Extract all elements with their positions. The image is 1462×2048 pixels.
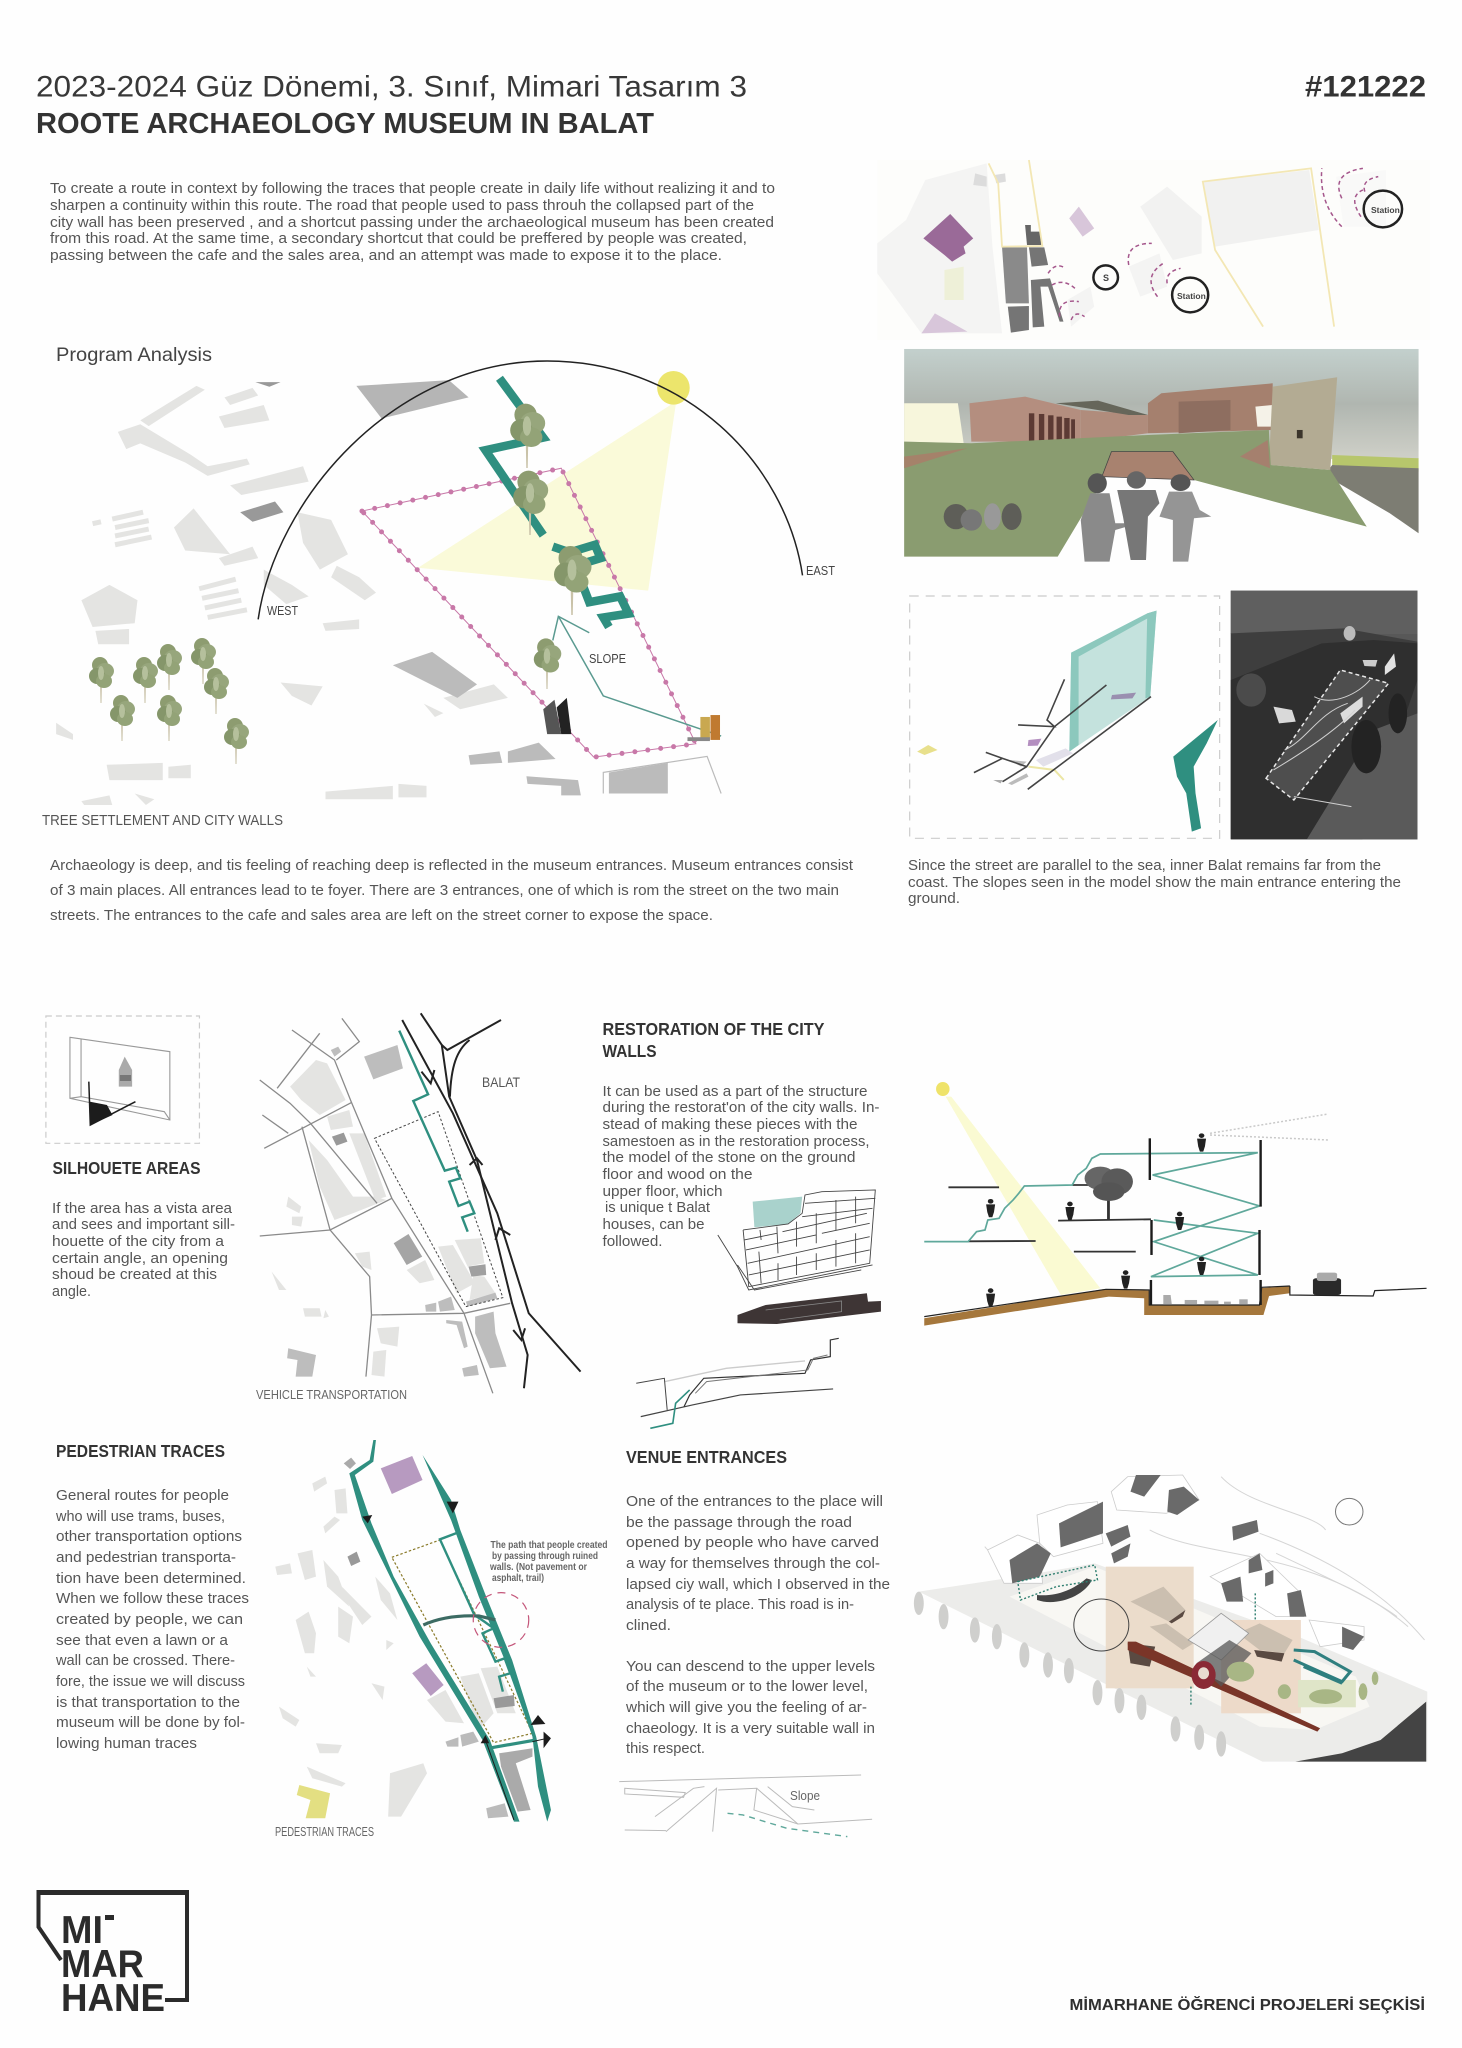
heading: restoration (602, 1019, 825, 1061)
floors (948, 1185, 1151, 1252)
callout: path annotation (489, 1539, 608, 1584)
pedestrian text: lowing human traces (56, 1736, 197, 1752)
entrances text block: of 3 main places. All entrances lead to te foyer. There are 3 entrances, one of which is rom the street on the two main (50, 883, 839, 899)
pedestrian text: see that even a lawn or a (56, 1633, 229, 1649)
model caption text (908, 858, 1401, 907)
context buildings (56, 386, 508, 805)
dashed view line (1254, 1593, 1256, 1620)
panel: axonometric site view (914, 1475, 1427, 1762)
label pedestrian traces: PEDESTRIAN TRACES (275, 1824, 374, 1839)
pedestrian text: fore, the issue we will discuss (56, 1674, 245, 1690)
teal route (399, 1031, 474, 1232)
people at east entrance (687, 715, 720, 741)
garden (1227, 1662, 1378, 1704)
contour lines (985, 1477, 1425, 1640)
pedestrian text (55, 1488, 249, 1752)
restoration text: houses, can be (602, 1217, 704, 1233)
label vehicle transportation: VEHICLE TRANSPORTATION (256, 1387, 407, 1402)
intro text block: from this road. At the same time, a secondary shortcut that could be preffered by people was created, (50, 231, 747, 247)
teal pedestrian routes (349, 1440, 551, 1822)
panel: vehicle transportation map (260, 1013, 581, 1393)
logo: Mimarhane: MAR (61, 1943, 144, 1986)
purple and yellow landmarks (297, 1456, 444, 1818)
icon: S stop (1093, 265, 1118, 289)
restoration text: stead of making these pieces with the (602, 1117, 858, 1133)
map label station east: Station (1371, 205, 1400, 215)
label east: EAST (806, 564, 835, 578)
map label S: S (1103, 273, 1109, 283)
pedestrian text: General routes for people (56, 1488, 229, 1504)
sun path arc (258, 361, 803, 619)
callout circles (1074, 1599, 1129, 1651)
restoration text: samestoen as in the restoration process, (602, 1134, 870, 1150)
callout: path annotation: asphalt, trail) (492, 1572, 544, 1584)
panel: stone wall sketch (718, 1190, 881, 1324)
restoration text: upper floor, which (602, 1184, 722, 1200)
model caption text: ground. (908, 891, 960, 907)
logo: Mimarhane: HANE (61, 1977, 165, 2020)
people sitting (944, 503, 1022, 531)
pedestrian text: who will use trams, buses, (55, 1509, 225, 1525)
panel: silhouette sketch (46, 1016, 199, 1143)
people walking (1081, 471, 1211, 562)
pedestrian text: and pedestrian transporta- (56, 1550, 236, 1566)
label tree settlement: TREE SETTLEMENT AND CITY WALLS (42, 812, 283, 829)
label balat: BALAT (482, 1075, 520, 1090)
venue text: which will give you the feeling of ar- (625, 1700, 867, 1716)
heading: restoration: WALLS (602, 1041, 656, 1061)
cafe pavilion (1037, 1578, 1092, 1602)
section walls (1150, 1138, 1261, 1305)
tree (1085, 1167, 1133, 1219)
silhouette text: certain angle, an opening (52, 1251, 228, 1267)
pedestrian text: wall can be crossed. There- (55, 1653, 235, 1669)
teal glass wall (1069, 611, 1157, 752)
teal structure (1294, 1650, 1350, 1683)
logo: Mimarhane (37, 1890, 188, 2020)
streets (260, 1018, 510, 1393)
venue text: clined. (626, 1618, 671, 1634)
label slope sketch: Slope (790, 1789, 820, 1803)
restoration text: It can be used as a part of the structure (602, 1084, 868, 1100)
silhouette text: If the area has a vista area (52, 1201, 233, 1217)
trees along the route (510, 404, 592, 689)
dashed frame (910, 596, 1220, 838)
icon: station (1172, 278, 1208, 312)
label west: WEST (267, 604, 298, 618)
intro text block: sharpen a continuity within this route. The road that people used to pass throuh the collapsed part of the (50, 198, 754, 214)
site boundary (362, 468, 696, 757)
ground plate (919, 1563, 1427, 1762)
entrances text block: streets. The entrances to the cafe and sales area are left on the street corner to expose the space. (50, 908, 713, 924)
slope arrow (553, 616, 721, 736)
heading: venue entrances: VENUE ENTRANCES (626, 1447, 787, 1467)
heading: silhouette areas: SILHOUETE AREAS (52, 1158, 200, 1178)
sea silhouette (1173, 720, 1218, 832)
pedestrian text: When we follow these traces (56, 1591, 249, 1607)
restoration text: floor and wood on the (602, 1167, 752, 1183)
callout: path annotation: The path that people created (490, 1539, 608, 1551)
label slope: SLOPE (589, 652, 626, 666)
heading: pedestrian traces: PEDESTRIAN TRACES (56, 1441, 225, 1461)
logo: Mimarhane: MI (61, 1909, 103, 1952)
site outline (392, 1540, 532, 1743)
restoration text (602, 1084, 880, 1250)
icon: purple block (923, 214, 973, 262)
photo collage: museum entrance (904, 349, 1419, 562)
model caption text: Since the street are parallel to the sea, inner Balat remains far from the (908, 858, 1381, 874)
rubble (1163, 1295, 1248, 1304)
callout: path annotation: walls. (Not pavement or (489, 1561, 587, 1573)
silhouette text: shoud be created at this (52, 1267, 217, 1283)
silhouette text: angle. (52, 1284, 91, 1300)
arrows (362, 1502, 551, 1748)
venue text: be the passage through the road (626, 1515, 852, 1531)
tree settlement cluster (89, 638, 249, 764)
venue text: chaeology. It is a very suitable wall in (626, 1721, 875, 1737)
people (986, 1133, 1206, 1307)
silhouette text: and sees and important sill- (52, 1217, 235, 1233)
heading: program analysis: Program Analysis (56, 344, 212, 366)
venue text: You can descend to the upper levels (626, 1659, 875, 1675)
dashed highlight circle (473, 1593, 529, 1647)
pedestrian text: created by people, we can (56, 1612, 243, 1628)
neighbouring buildings (988, 1475, 1364, 1647)
teal route (485, 378, 629, 627)
pedestrian text: other transportation options (56, 1529, 242, 1545)
pedestrian text: tion have been determined. (56, 1571, 246, 1587)
panel: site program diagram (56, 361, 803, 805)
sun beam (946, 1097, 1100, 1295)
venue text: of the museum or to the lower level, (626, 1679, 868, 1695)
intro text block: To create a route in context by following the traces that people create in daily life without realizing it and to (50, 181, 775, 197)
museum blocks (1130, 1587, 1293, 1653)
icon: car (1313, 1273, 1341, 1295)
model caption text: coast. The slopes seen in the model show the main entrance entering the (908, 875, 1401, 891)
venue text (625, 1494, 890, 1757)
silhouette text (52, 1201, 235, 1300)
icon: station east (1364, 191, 1402, 227)
venue text: lapsed ciy wall, which I observed in the (626, 1577, 890, 1593)
teal wall infill (753, 1197, 802, 1227)
venue text: this respect. (626, 1741, 705, 1757)
sun (657, 371, 690, 405)
heading: restoration: RESTORATION OF THE CITY (602, 1019, 825, 1039)
title: semester line: 2023-2024 Güz Dönemi, 3. Sınıf, Mimari Tasarım 3 (36, 70, 747, 104)
shortcut bridge (423, 1616, 495, 1625)
pedestrian text: museum will be done by fol- (56, 1715, 245, 1731)
map label station: Station (1177, 291, 1206, 301)
panel: pedestrian traces map (275, 1440, 551, 1822)
icon: galata tower (119, 1057, 132, 1087)
restoration text: is unique t Balat (605, 1200, 710, 1216)
project number: #121222 (1305, 70, 1426, 104)
site outline (374, 1112, 503, 1307)
intro text block: passing between the cafe and the sales area, and an attempt was made to expose it to the place. (50, 248, 722, 264)
sun (936, 1082, 950, 1096)
entrances text block: Archaeology is deep, and tis feeling of reaching deep is reflected in the museum entrances. Museum entrances consist (50, 858, 853, 874)
venue text: opened by people who have carved (626, 1535, 879, 1551)
entrances text block (50, 858, 853, 924)
wood planks (738, 1293, 881, 1324)
teal stairs and ramps (924, 1153, 1260, 1277)
venue text: a way for themselves through the col- (626, 1556, 880, 1572)
panel: terrain profile sketch (636, 1338, 839, 1428)
intro text block (50, 181, 775, 264)
view lines (1210, 1114, 1328, 1140)
panel: model photo (1231, 591, 1417, 839)
title: project name: ROOTE ARCHAEOLOGY MUSEUM IN BALAT (36, 108, 654, 140)
callout: path annotation: by passing through ruined (492, 1550, 598, 1562)
venue text: One of the entrances to the place will (626, 1494, 883, 1510)
silhouette text: houette of the city from a (52, 1234, 225, 1250)
ground (924, 1286, 1290, 1326)
glass roof (1188, 1613, 1249, 1660)
tan plan overlays (1106, 1567, 1194, 1688)
people at west entrance (543, 698, 571, 734)
main roads with arrows (402, 1013, 581, 1388)
icon: viewing wedge (90, 1102, 112, 1125)
bay (1295, 1702, 1426, 1762)
red circular stair (1191, 1661, 1216, 1689)
footer label: MİMARHANE ÖĞRENCİ PROJELERİ SEÇKİSİ (1070, 1995, 1425, 2014)
red wall (1128, 1642, 1320, 1732)
panel: entrance slope sketch (619, 1775, 872, 1837)
venue text: analysis of te place. This road is in- (626, 1597, 854, 1613)
panel: station map (877, 160, 1430, 340)
intro text block: city wall has been preserved , and a shortcut passing under the archaeological museum has been created (50, 215, 774, 231)
sun light cone (418, 401, 676, 591)
row of trees (914, 1592, 1226, 1757)
panel: section drawing (924, 1082, 1427, 1326)
pedestrian text: is that transportation to the (56, 1695, 240, 1711)
restoration text: during the restorat'on of the city walls. In- (602, 1100, 880, 1116)
panel: axonometric wall diagram (910, 596, 1220, 838)
restoration text: the model of the stone on the ground (602, 1150, 856, 1166)
restoration text: followed. (602, 1234, 662, 1250)
